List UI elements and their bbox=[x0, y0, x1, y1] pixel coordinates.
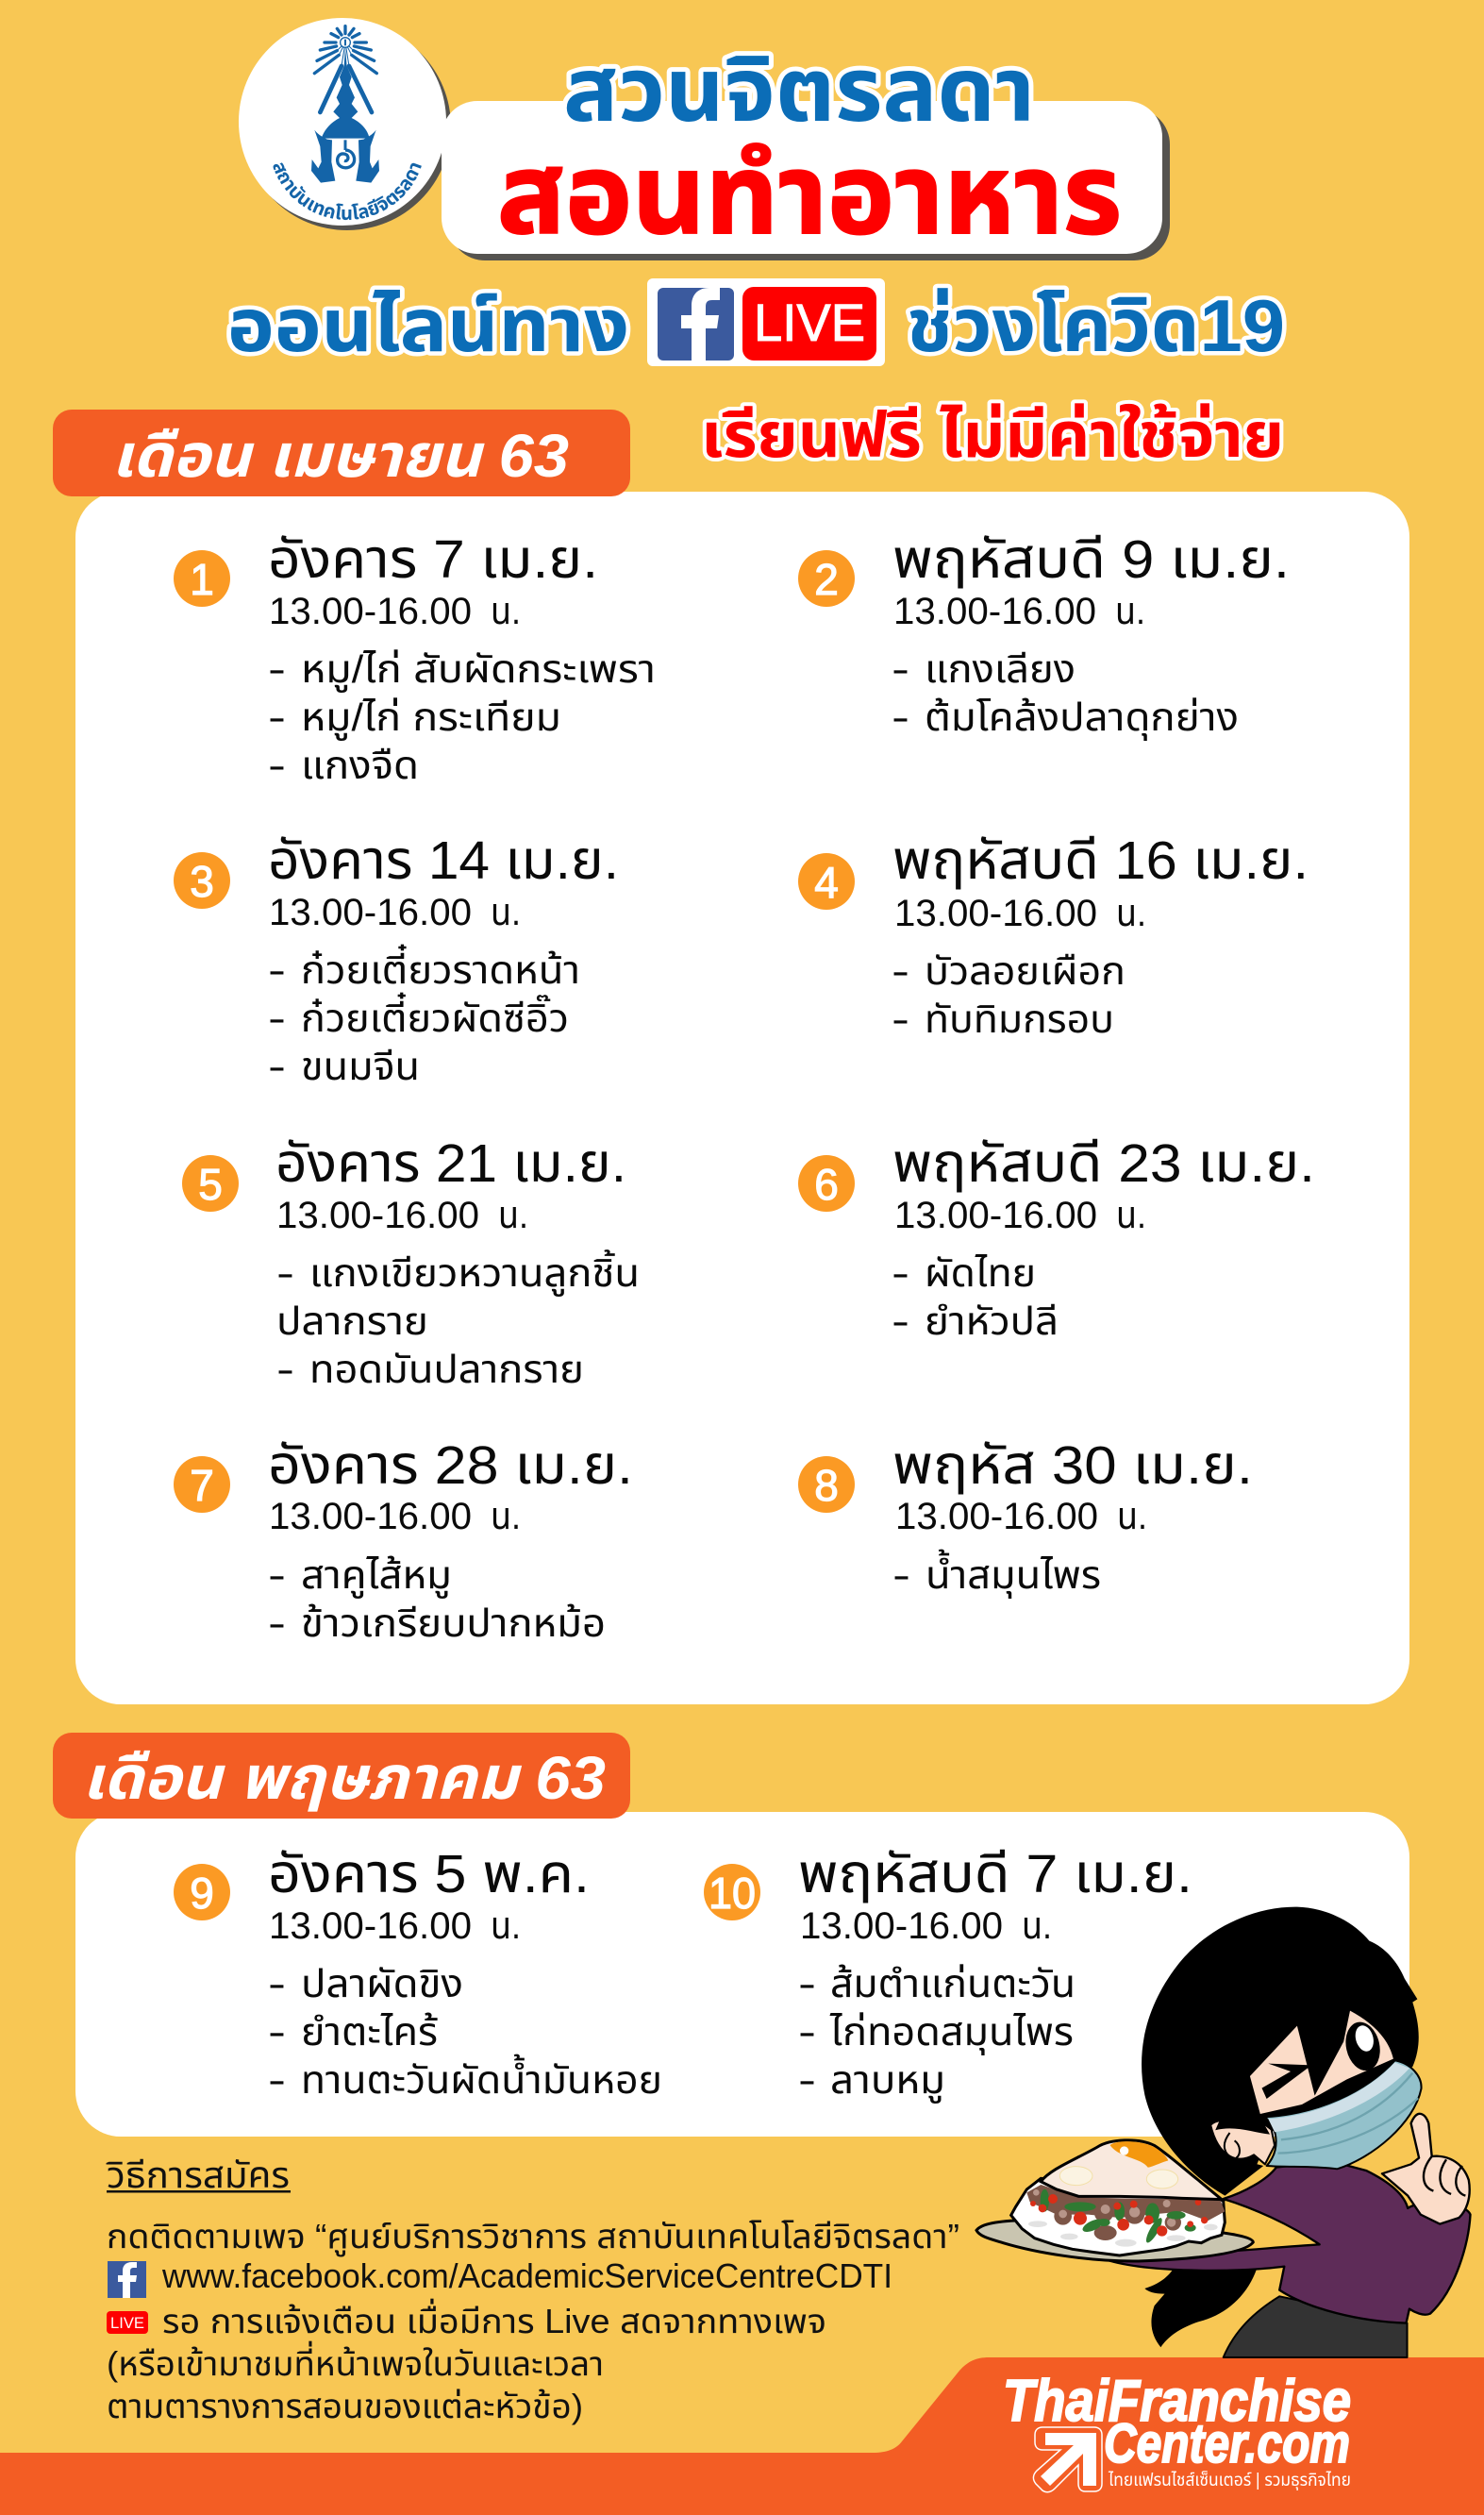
item 10: - bbox=[798, 2010, 816, 2054]
how to apply: วิธีการสมัคร bbox=[106, 2156, 290, 2196]
item 10: ไก่ทอดสมุนไพร bbox=[829, 2010, 1074, 2055]
item 4: 13.00-16.00 bbox=[894, 893, 1097, 934]
item 9: 13.00-16.00 bbox=[269, 1905, 472, 1947]
item 2: 2 bbox=[814, 555, 839, 604]
item 7: 7 bbox=[190, 1461, 214, 1510]
item 6: - bbox=[892, 1299, 909, 1343]
how to apply: www.facebook.com/AcademicServiceCentreCDTI bbox=[161, 2256, 892, 2295]
item 3: ก๋วยเตี๋ยวผัดซีอิ๊ว bbox=[301, 992, 569, 1040]
item 7: 13.00-16.00 bbox=[269, 1496, 472, 1537]
how to apply: รอ การแจ้งเตือน เมื่อมีการ Live สดจากทางเพจ bbox=[162, 2298, 826, 2340]
free tuition note: เรียนฟรี ไม่มีค่าใช้จ่าย bbox=[701, 400, 1284, 471]
footer logo: ThaiFranchise bbox=[1003, 2369, 1351, 2434]
item 9: - bbox=[268, 1962, 286, 2005]
mask bbox=[1265, 2060, 1422, 2169]
item 3: ก๋วยเตี๋ยวราดหน้า bbox=[301, 944, 580, 992]
subtitle left: ออนไลน์ทาง bbox=[227, 284, 629, 367]
item 1: 13.00-16.00 bbox=[269, 591, 472, 632]
item 2 bbox=[798, 529, 1290, 741]
how to apply: กดติดตามเพจ “ศูนย์บริการวิชาการ สถาบันเทคโนโลยีจิตรลดา” bbox=[107, 2217, 959, 2256]
item 5: - bbox=[276, 1348, 294, 1391]
item 10: 10 bbox=[709, 1869, 756, 1918]
hand bbox=[1382, 2114, 1470, 2224]
item 1: หมู/ไก่ สับผัดกระเพรา bbox=[301, 647, 656, 693]
item 10: ส้มตำแก่นตะวัน bbox=[830, 1962, 1075, 2005]
item 8: - bbox=[892, 1553, 910, 1597]
item 10: ลาบหมู bbox=[830, 2058, 945, 2104]
logo curved name: สถาบันเทคโนโลยีจิตรลดา bbox=[274, 162, 422, 221]
item 9: อังคาร 5 พ.ค. bbox=[268, 1844, 590, 1904]
title line 2: สอนทำอาหาร bbox=[497, 133, 1122, 258]
icon: live small bbox=[107, 2311, 148, 2334]
item 1: - bbox=[268, 696, 286, 739]
item 7: น. bbox=[491, 1496, 521, 1537]
item 4: น. bbox=[1116, 893, 1146, 934]
item 7: ข้าวเกรียบปากหม้อ bbox=[301, 1601, 606, 1645]
item 4: - bbox=[892, 998, 909, 1041]
how to apply: ตามตารางการสอนของแต่ละหัวข้อ) bbox=[107, 2387, 583, 2425]
item 3: อังคาร 14 เม.ย. bbox=[268, 830, 619, 891]
panel: april bbox=[75, 492, 1409, 1704]
item 1: น. bbox=[491, 591, 521, 632]
item 2: - bbox=[892, 647, 909, 691]
item 2: น. bbox=[1115, 591, 1145, 632]
item 3: ขนมจีน bbox=[301, 1045, 420, 1088]
plate of food bbox=[976, 2140, 1253, 2261]
item 5 bbox=[182, 1133, 640, 1391]
item 8 bbox=[798, 1435, 1253, 1599]
item 6: ผัดไทย bbox=[925, 1251, 1036, 1295]
heading tab: april bbox=[53, 410, 630, 496]
item 3: 3 bbox=[190, 857, 214, 906]
item 4: 4 bbox=[814, 858, 839, 907]
item 2: 13.00-16.00 bbox=[893, 591, 1096, 632]
item 1: แกงจืด bbox=[301, 744, 419, 787]
face bbox=[1250, 2011, 1393, 2114]
item 3: - bbox=[268, 948, 286, 992]
title line 1: สวนจิตรลดา bbox=[563, 41, 1035, 140]
item 5: อังคาร 21 เม.ย. bbox=[275, 1133, 626, 1194]
item 8: พฤหัส 30 เม.ย. bbox=[892, 1435, 1253, 1496]
item 1: - bbox=[268, 647, 286, 691]
ear bbox=[1210, 2116, 1275, 2164]
item 4: บัวลอยเผือก bbox=[925, 949, 1126, 993]
item 2: แกงเลียง bbox=[925, 647, 1075, 691]
how to apply bbox=[106, 2156, 959, 2425]
footer logo: ไทยแฟรนไชส์เซ็นเตอร์ | รวมธุรกิจไทย bbox=[1108, 2471, 1351, 2490]
icon: live small: LIVE bbox=[110, 2314, 144, 2332]
long hair bbox=[1144, 2268, 1257, 2347]
item 3: - bbox=[268, 1045, 286, 1088]
item 10 bbox=[704, 1844, 1192, 2104]
item 10: - bbox=[798, 2058, 816, 2102]
item 6: พฤหัสบดี 23 เม.ย. bbox=[892, 1133, 1315, 1194]
item 6 bbox=[798, 1133, 1315, 1343]
footer logo bbox=[1003, 2369, 1351, 2492]
item 6: 13.00-16.00 bbox=[894, 1195, 1097, 1236]
item 7: สาคูไส้หมู bbox=[301, 1553, 452, 1599]
item 8: น. bbox=[1117, 1496, 1147, 1537]
footer logo: Center.com bbox=[1104, 2413, 1350, 2474]
item 8: น้ำสมุนไพร bbox=[925, 1549, 1101, 1599]
panel: may bbox=[75, 1812, 1409, 2137]
heading tab: may bbox=[53, 1733, 630, 1819]
item 7: อังคาร 28 เม.ย. bbox=[268, 1435, 633, 1496]
item 9: - bbox=[268, 2010, 286, 2054]
item 2: พฤหัสบดี 9 เม.ย. bbox=[892, 529, 1290, 590]
item 4 bbox=[798, 830, 1309, 1041]
item 8: 13.00-16.00 bbox=[895, 1496, 1098, 1537]
wink bbox=[1262, 2064, 1311, 2099]
item 5: - bbox=[276, 1251, 294, 1295]
item 3 bbox=[174, 830, 619, 1088]
item 9: 9 bbox=[190, 1869, 214, 1918]
item 6: น. bbox=[1116, 1195, 1146, 1236]
character holding plate bbox=[976, 1907, 1470, 2357]
item 10: น. bbox=[1022, 1905, 1052, 1947]
item 4: พฤหัสบดี 16 เม.ย. bbox=[892, 830, 1309, 891]
item 1: หมู/ไก่ กระเทียม bbox=[301, 696, 561, 741]
item 6: 6 bbox=[814, 1160, 839, 1209]
item 3: น. bbox=[491, 892, 521, 933]
item 10: - bbox=[798, 1962, 816, 2005]
item 1: - bbox=[268, 744, 286, 787]
pants bbox=[1224, 2296, 1408, 2357]
item 9: - bbox=[268, 2058, 286, 2102]
item 6: ยำหัวปลี bbox=[925, 1299, 1059, 1343]
item 5: 13.00-16.00 bbox=[276, 1195, 479, 1236]
item 5: 5 bbox=[198, 1160, 223, 1209]
item 3: 13.00-16.00 bbox=[269, 892, 472, 933]
item 1: 1 bbox=[190, 555, 214, 604]
item 1 bbox=[174, 529, 656, 787]
item 10: 13.00-16.00 bbox=[800, 1905, 1003, 1947]
item 3: - bbox=[268, 997, 286, 1040]
facebook live badge bbox=[647, 278, 885, 366]
item 2: ต้มโคล้งปลาดุกย่าง bbox=[925, 696, 1239, 741]
logo badge bbox=[239, 18, 451, 230]
item 8: 8 bbox=[814, 1461, 839, 1510]
how to apply: (หรือเข้ามาชมที่หน้าเพจในวันและเวลา bbox=[107, 2340, 604, 2383]
item 5: แกงเขียวหวานลูกชิ้น bbox=[309, 1249, 640, 1297]
subtitle right: ช่วงโควิด19 bbox=[907, 284, 1285, 367]
item 9: ทานตะวันผัดน้ำมันหอย bbox=[301, 2054, 662, 2102]
item 9: น. bbox=[491, 1905, 521, 1947]
item 6: - bbox=[892, 1251, 909, 1295]
item 10: พฤหัสบดี 7 เม.ย. bbox=[798, 1844, 1192, 1904]
item 4: - bbox=[892, 949, 909, 993]
item 7 bbox=[174, 1435, 633, 1645]
item 7: - bbox=[268, 1601, 286, 1645]
footer band bbox=[0, 2357, 1484, 2515]
icon: arrow bbox=[1033, 2427, 1102, 2492]
eye bbox=[1342, 2019, 1384, 2073]
title box bbox=[442, 101, 1170, 260]
item 2: - bbox=[892, 696, 909, 739]
item 5: ปลากราย bbox=[276, 1299, 428, 1343]
facebook live badge: LIVE bbox=[754, 293, 865, 352]
item 1: อังคาร 7 เม.ย. bbox=[268, 529, 598, 590]
jacket bbox=[1103, 2161, 1470, 2323]
icon: facebook small bbox=[108, 2261, 146, 2298]
item 4: ทับทิมกรอบ bbox=[925, 998, 1114, 1041]
heading tab: may: เดือน พฤษภาคม 63 bbox=[82, 1744, 606, 1812]
item 5: น. bbox=[498, 1195, 528, 1236]
heading tab: april: เดือน เมษายน 63 bbox=[111, 422, 569, 490]
item 7: - bbox=[268, 1553, 286, 1597]
item 5: ทอดมันปลากราย bbox=[309, 1348, 584, 1391]
item 9: ยำตะไคร้ bbox=[301, 2010, 438, 2054]
item 9: ปลาผัดขิง bbox=[301, 1962, 463, 2005]
hair main bbox=[1142, 1907, 1419, 2196]
item 9 bbox=[174, 1844, 662, 2102]
